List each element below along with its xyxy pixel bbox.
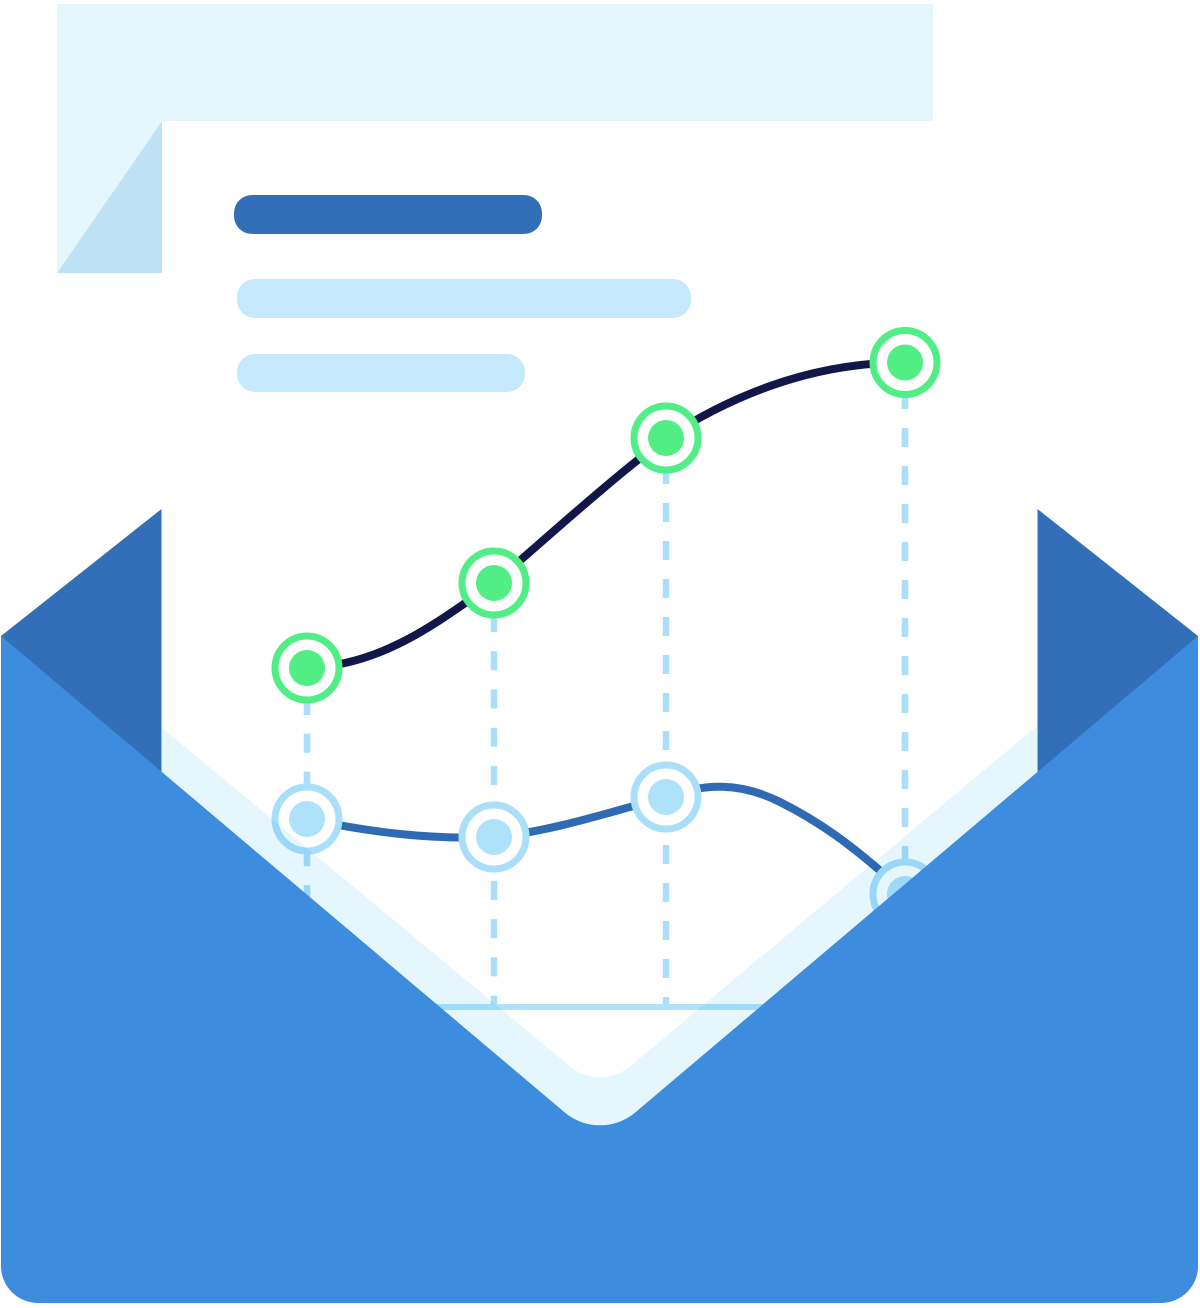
document sheet (162, 121, 1037, 1200)
document heading bar (234, 195, 542, 234)
dashed drop lines (307, 390, 905, 1004)
chart axis baseline (420, 1004, 780, 1010)
lower chart line (307, 787, 905, 893)
document text line 1 (237, 279, 691, 318)
document text line 2 (237, 354, 525, 392)
lower series markers (275, 765, 937, 926)
envelope front (1, 636, 1198, 1303)
translucent envelope liner (162, 726, 1037, 1200)
document folded top band (57, 4, 933, 273)
upper chart line (307, 362, 905, 668)
upper series markers (275, 330, 937, 700)
envelope back flaps (1, 509, 1198, 800)
